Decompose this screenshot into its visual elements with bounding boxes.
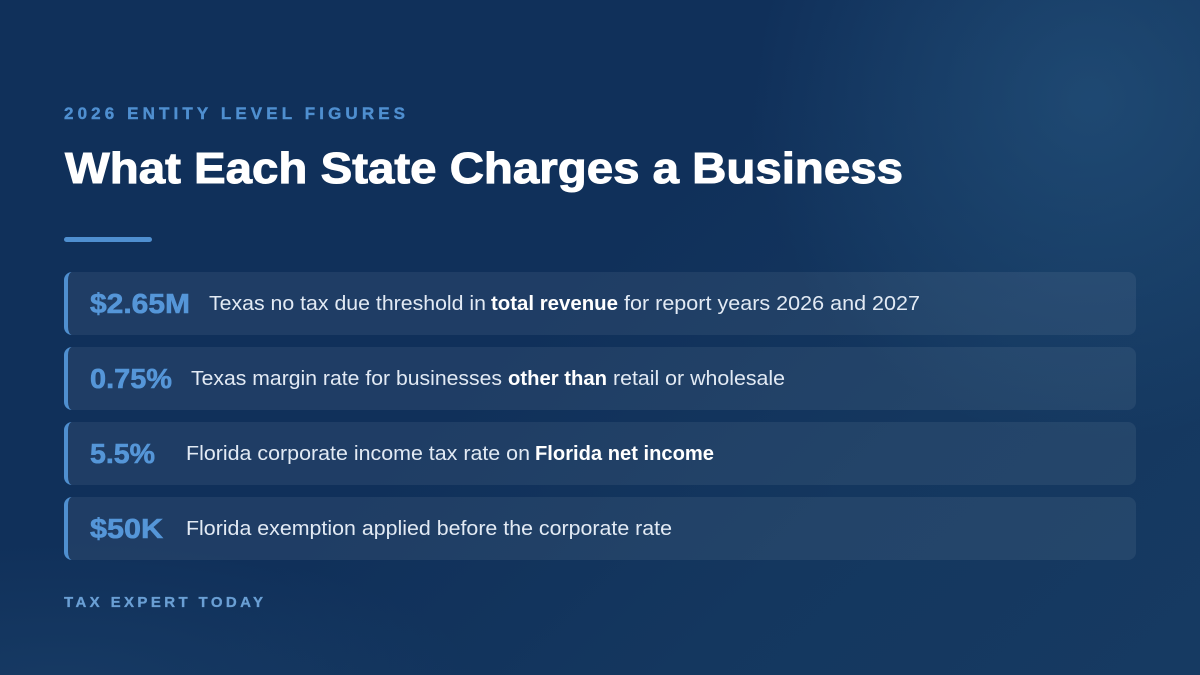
description: Texas threshold: [209, 292, 920, 315]
description: Texas threshold: for report years 2026 and 2027: [624, 292, 920, 315]
figure: 5.5%: 5.5%: [90, 438, 155, 469]
figure: $2.65M: $2.65M: [90, 288, 190, 319]
title: What Each State Charges a Business: [65, 144, 903, 193]
description: Texas threshold: total revenue: [491, 292, 618, 315]
description: Florida corporate rate: Florida corporate income tax rate on: [186, 442, 530, 465]
description: Texas margin rate: [191, 367, 785, 390]
description: Texas threshold: Texas no tax due threshold in: [209, 292, 486, 315]
footer source label: TAX EXPERT TODAY: [64, 594, 263, 611]
description: Florida corporate rate: [186, 442, 714, 465]
description: Texas margin rate: retail or wholesale: [613, 367, 785, 390]
panel: Texas margin rate: [64, 347, 1136, 410]
description: Texas margin rate: Texas margin rate for businesses: [191, 367, 502, 390]
panel: Florida corporate rate: [64, 422, 1136, 485]
figure: 0.75%: 0.75%: [90, 363, 172, 394]
figure: $50K: $50K: [90, 513, 163, 544]
accent bar: [64, 237, 152, 242]
description: Florida corporate rate: Florida net income: [535, 442, 714, 465]
description: Florida exemption: Florida exemption applied before the corporate rate: [186, 517, 672, 540]
panel: Texas threshold: [64, 272, 1136, 335]
eyebrow heading: 2026 ENTITY LEVEL FIGURES: [64, 104, 405, 123]
panel: Florida exemption: [64, 497, 1136, 560]
description: Texas margin rate: other than: [508, 367, 607, 390]
